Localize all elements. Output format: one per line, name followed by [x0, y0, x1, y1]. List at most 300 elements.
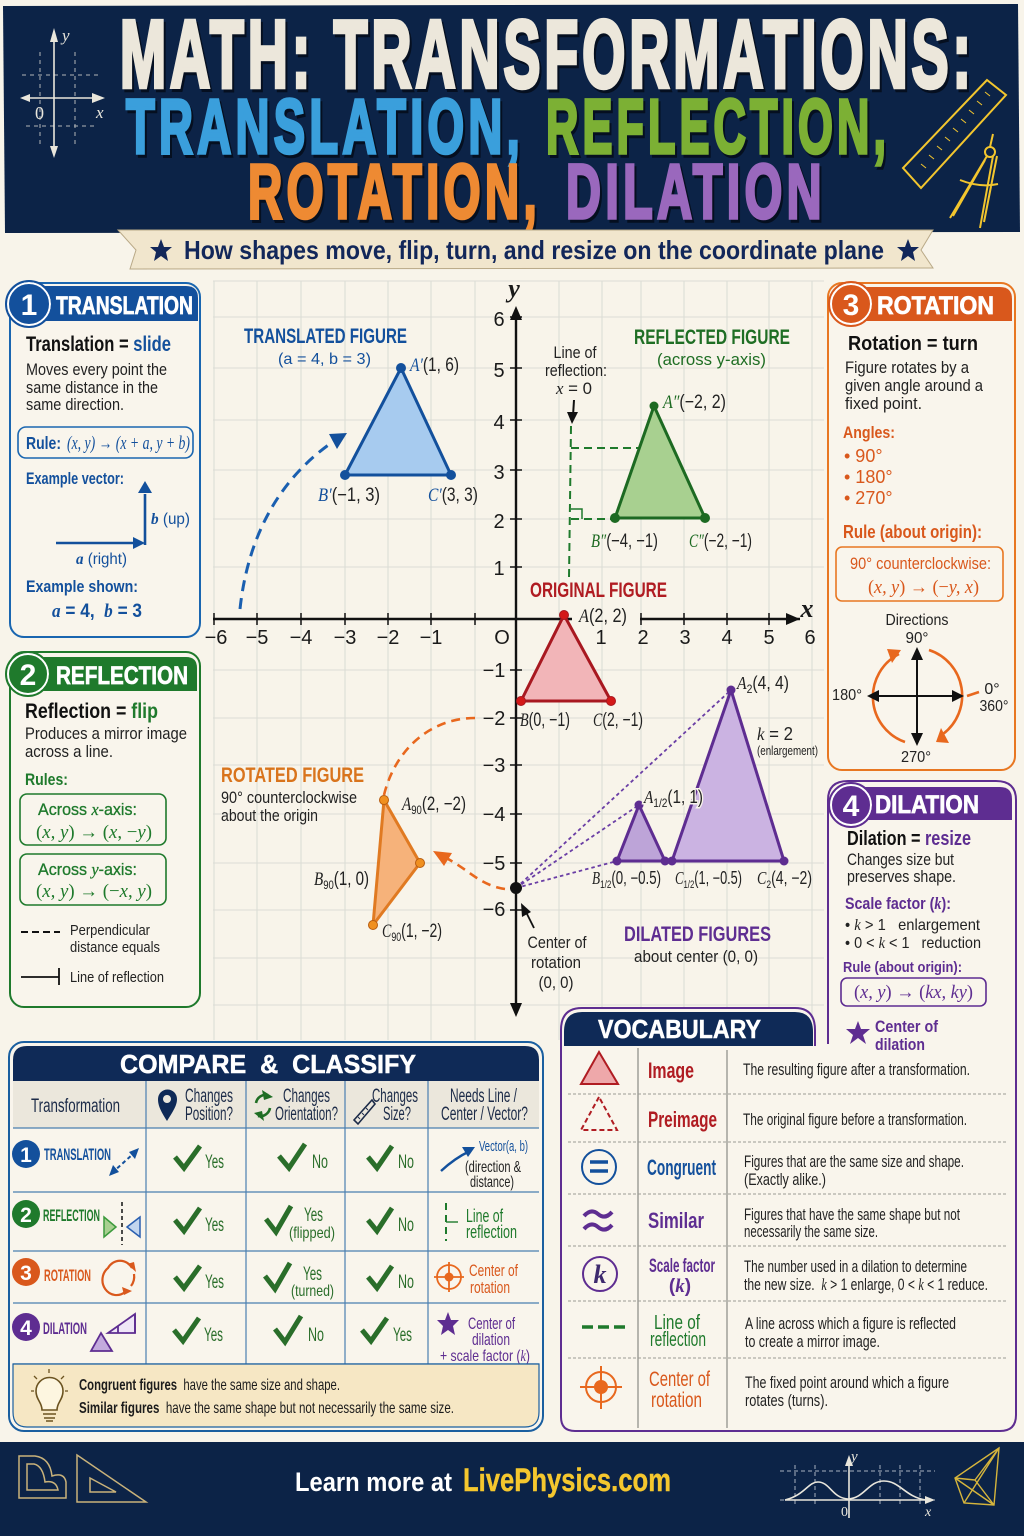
term: congruent: [582, 1150, 964, 1189]
translated figure: [240, 325, 478, 609]
center of dilation note: Center of: [875, 1017, 938, 1036]
directions diagram: 360°: [980, 698, 1008, 715]
term: line of reflection: Line of: [654, 1312, 700, 1334]
panel: vocabulary: [561, 1008, 1016, 1431]
icon: coordinate axes: y: [60, 26, 70, 45]
rotation rule box: [836, 547, 1003, 601]
translated heading: TRANSLATED FIGURE: [244, 325, 407, 348]
axis labels: −2: [377, 627, 399, 649]
dilation rule heading: Rule (about origin):: [843, 959, 962, 976]
column header band: Changes: [185, 1086, 233, 1107]
vector labels: [76, 511, 190, 568]
axis labels: 1: [493, 558, 505, 580]
axis labels: −4: [483, 804, 505, 826]
footer link text: LivePhysics.com: [463, 1462, 671, 1498]
directions diagram: 0°: [984, 681, 1000, 698]
reflection guide lines: [569, 426, 640, 578]
rule box: y-axis: Across y-axis:: [38, 860, 137, 879]
vocabulary header: [564, 1012, 813, 1046]
column header band: Position?: [185, 1104, 233, 1125]
legend: line of reflection: Line of reflection: [70, 969, 164, 986]
line of reflection label: [545, 343, 607, 398]
axis labels: −3: [334, 627, 356, 649]
reflection definition: Reflection = flip: [25, 700, 158, 723]
rotated triangle: [373, 800, 420, 925]
row: rotation: (turned): [291, 1283, 334, 1300]
rotation rule box: 90° counterclockwise:: [850, 554, 991, 573]
angles list: • 270°: [844, 488, 893, 508]
example shown: a = 4, b = 3: [52, 601, 142, 622]
rotated vertex labels: (2, −2): [422, 794, 466, 815]
icon: ruler and compass: [903, 80, 1006, 228]
example vector heading: Example vector:: [26, 470, 124, 488]
term: center of rotation: The fixed point around which a figure: [745, 1373, 949, 1392]
rotation rule heading: Rule (about origin):: [843, 522, 982, 542]
original heading: ORIGINAL FIGURE: [530, 579, 667, 602]
term: congruent: (Exactly alike.): [744, 1170, 826, 1189]
term: center of rotation: Center of: [649, 1368, 710, 1391]
panel: dilation: [828, 781, 1016, 1054]
rotated vertex labels: (1, −2): [401, 921, 442, 942]
axis labels: 5: [493, 360, 505, 382]
row: reflection: 2: [20, 1204, 32, 1227]
row: dilation: Yes: [393, 1325, 412, 1346]
panel: translation: [6, 281, 200, 637]
dilation dotted rays: [516, 690, 731, 888]
reflected figure: [545, 326, 790, 578]
center of rotation: rotation: [531, 953, 581, 972]
dilation labels: 1/2: [600, 879, 611, 891]
center of rotation: Center of: [528, 933, 587, 952]
row: translation: No: [312, 1152, 328, 1173]
dilation labels: 1/2: [683, 879, 694, 891]
rotation description: fixed point.: [845, 395, 922, 413]
translation description: same direction.: [26, 396, 124, 414]
term: preimage: [581, 1097, 967, 1132]
axis labels: 6: [804, 627, 816, 649]
axis labels: −6: [483, 899, 505, 921]
term: scale factor: [583, 1256, 988, 1297]
row: rotation: Yes: [205, 1272, 224, 1293]
icon: coordinate axes: 0: [35, 103, 44, 123]
translated triangle: [345, 368, 451, 475]
row: dilation: [12, 1312, 530, 1365]
line of reflection note: reflection: [466, 1222, 517, 1242]
translation rule box: [18, 427, 193, 458]
reflection description: Produces a mirror image: [25, 725, 187, 743]
row: reflection: [12, 1200, 517, 1245]
center of rotation: (0, 0): [538, 973, 574, 992]
dilation labels: (4, −2): [771, 868, 812, 888]
row: reflection: Yes: [205, 1215, 224, 1236]
scale factor list: Scale factor (k):: [845, 894, 951, 913]
reflected vertices: [610, 402, 710, 523]
icon: light bulb: [31, 1369, 68, 1421]
rotated description: about the origin: [221, 806, 318, 825]
tip callout: [13, 1364, 539, 1427]
axis labels: −4: [290, 627, 312, 649]
row: translation: [12, 1139, 528, 1191]
original vertex labels: C(2, −1): [593, 710, 643, 731]
vector note: Vector(a, b): [479, 1139, 528, 1155]
dilation rule box: (x, y) → (kx, ky): [854, 982, 973, 1003]
translated vertex labels: [318, 355, 478, 506]
dilated heading: DILATED FIGURES: [624, 923, 771, 946]
angles list: • 180°: [844, 467, 893, 487]
header banner: [3, 1, 1020, 235]
term: similar: Similar: [648, 1208, 704, 1233]
axis labels: −2: [483, 708, 505, 730]
title: translation: TRANSLATION,: [126, 84, 524, 170]
term: scale factor: Scale factor: [649, 1256, 715, 1277]
rule box: y-axis: (x, y) → (−x, y): [36, 881, 152, 902]
subtitle text: How shapes move, flip, turn, and resize on the coordinate plane: [184, 235, 884, 265]
term: center of rotation: rotation: [651, 1389, 702, 1412]
dilation labels: C: [757, 868, 767, 888]
rotated heading: ROTATED FIGURE: [221, 764, 364, 787]
dilation labels: B: [592, 868, 600, 888]
column header band: Changes: [372, 1086, 418, 1107]
original figure: [516, 579, 667, 731]
dilation header: [829, 783, 1012, 827]
rotated description: 90° counterclockwise: [221, 788, 357, 807]
dilation labels: A: [736, 673, 747, 693]
center of rotation note: rotation: [470, 1278, 510, 1297]
row: reflection: (flipped): [289, 1225, 335, 1242]
row: rotation: ROTATION: [44, 1266, 91, 1285]
icon: position pin: [158, 1090, 177, 1121]
vector labels: b (up): [151, 511, 190, 528]
original vertex labels: B(0, −1): [520, 710, 570, 731]
translated vertex labels: B′(−1, 3): [318, 485, 380, 506]
axis labels: −1: [420, 627, 442, 649]
center of dilation note: [437, 1312, 530, 1365]
translation rule box: Rule:: [26, 433, 61, 453]
translation header: [6, 281, 198, 327]
reflection header: REFLECTION: [56, 662, 188, 690]
line of reflection note: Line of: [466, 1206, 504, 1226]
row: reflection: Yes: [304, 1205, 323, 1226]
rotated vertex labels: [314, 794, 466, 944]
dilation header: DILATION: [875, 791, 979, 819]
dilation description: Changes size but: [847, 851, 954, 869]
row: translation: Yes: [205, 1152, 224, 1173]
row: rotation: No: [398, 1272, 414, 1293]
row: dilation: Yes: [204, 1325, 223, 1346]
dilated figures: [516, 673, 818, 966]
compare header: [13, 1046, 539, 1081]
angles list: Angles:: [843, 423, 895, 442]
axis labels: O: [494, 627, 510, 649]
column header band: Transformation: [31, 1096, 120, 1117]
rotation rule box: (x, y) → (−y, x): [868, 577, 979, 598]
vocabulary header: VOCABULARY: [598, 1014, 761, 1044]
center of rotation note: [434, 1261, 518, 1297]
rule box: x-axis: [20, 794, 166, 845]
icon: wave graph: [780, 1449, 935, 1520]
icon: wave graph: 0: [841, 1505, 848, 1520]
angles list: [843, 423, 895, 508]
reflected heading: REFLECTED FIGURE: [634, 326, 790, 349]
translation header: TRANSLATION: [56, 292, 193, 320]
dilation labels: (1, 1): [667, 787, 703, 807]
dilation labels: 1/2: [653, 796, 668, 810]
row: translation: 1: [20, 1144, 32, 1167]
dilation labels: C: [675, 868, 684, 888]
example shown: Example shown:: [26, 578, 138, 596]
directions diagram: [832, 612, 1008, 766]
rules heading: Rules:: [25, 771, 68, 789]
row: dilation: 4: [20, 1317, 32, 1340]
panel: rotation: [828, 282, 1015, 770]
row: rotation: Yes: [303, 1264, 322, 1285]
axis labels: 4: [493, 412, 505, 434]
icon: wave graph: x: [924, 1505, 932, 1520]
vector note: (direction &: [465, 1159, 521, 1176]
term: scale factor: k: [594, 1260, 606, 1289]
center of dilation note: dilation: [472, 1330, 510, 1349]
title: dilation: DILATION: [566, 149, 826, 235]
example shown: [26, 578, 142, 622]
icon: wave graph: y: [849, 1449, 858, 1465]
term: line of reflection: to create a mirror image.: [745, 1332, 880, 1351]
table grid lines: [13, 1081, 539, 1364]
dilation description: preserves shape.: [847, 868, 956, 886]
dilation rule box: [841, 978, 986, 1006]
dilation vertices: [612, 686, 788, 866]
panel: reflection: [6, 652, 200, 1007]
center of dilation note: dilation: [875, 1035, 925, 1054]
term: congruent: Congruent: [647, 1155, 716, 1180]
legend: perpendicular: Perpendicular: [70, 922, 150, 939]
dilation labels: k = 2: [757, 724, 793, 744]
term: preimage: Preimage: [648, 1107, 717, 1132]
translation description: same distance in the: [26, 379, 158, 397]
legend: line of reflection: [21, 968, 164, 986]
dilated subheading: about center (0, 0): [634, 947, 758, 966]
reflected triangle: [615, 406, 705, 518]
rotated vertices: [368, 796, 424, 930]
translated vertices: [340, 363, 456, 480]
axis labels: y: [505, 274, 520, 303]
compare header: COMPARE & CLASSIFY: [120, 1049, 416, 1079]
reflected vertex labels: [591, 392, 752, 552]
coordinate plane chart: [205, 274, 824, 1040]
rotation header: 3: [843, 289, 859, 322]
footer link text: [295, 1462, 671, 1498]
translation header: 1: [21, 289, 37, 322]
rotation header: ROTATION: [877, 292, 994, 320]
angles list: • 90°: [844, 446, 883, 466]
rotated vertex labels: 90: [411, 803, 422, 817]
row: rotation: 3: [20, 1262, 32, 1285]
footer link text: Learn more at: [295, 1467, 452, 1497]
center of dilation note: [846, 1017, 938, 1054]
scale factor list: [845, 894, 981, 952]
center of dilation note: Center of: [468, 1314, 515, 1333]
vocabulary table lines: [568, 1048, 1007, 1428]
large triangle: [672, 690, 784, 861]
dilation labels: (1, −0.5): [694, 868, 742, 888]
rotated vertex labels: (1, 0): [334, 869, 369, 890]
dilation labels: 2: [766, 879, 771, 891]
original triangle: [521, 615, 611, 701]
directions diagram: 270°: [901, 749, 931, 766]
column header band: Size?: [383, 1104, 411, 1125]
term: line of reflection: [582, 1312, 956, 1351]
axis labels: 2: [637, 627, 649, 649]
reflection header: [6, 652, 197, 696]
row: reflection: No: [398, 1215, 414, 1236]
column header band: [13, 1081, 539, 1128]
center of rotation: [510, 882, 587, 992]
directions diagram: Directions: [886, 612, 948, 629]
icon: orientation arrows: [254, 1090, 273, 1121]
axis labels: 3: [679, 627, 691, 649]
dilation header: 4: [843, 790, 860, 823]
vector note: [441, 1139, 528, 1191]
footer: [0, 1442, 1024, 1536]
axis labels: 6: [493, 309, 505, 331]
translation definition: Translation = slide: [26, 333, 171, 356]
arrow: rotation arc: [384, 718, 505, 889]
term: scale factor: (k): [669, 1276, 691, 1297]
legend: perpendicular: distance equals: [70, 939, 160, 956]
rotated figure: [221, 718, 505, 944]
row: translation: No: [398, 1152, 414, 1173]
original vertex labels: [520, 606, 643, 731]
translation rule box: (x, y) → (x + a, y + b): [67, 433, 190, 454]
column header band: Changes: [283, 1086, 330, 1107]
icon: coordinate axes: x: [95, 103, 104, 122]
center of rotation note: Center of: [469, 1261, 518, 1280]
axis labels: [205, 274, 816, 921]
row: rotation: [12, 1258, 518, 1300]
small triangle: [617, 805, 665, 861]
axis labels: 5: [763, 627, 775, 649]
rule box: y-axis: [20, 854, 166, 905]
translation description: [26, 361, 167, 414]
translation description: Moves every point the: [26, 361, 167, 379]
dilation labels: (4, 4): [752, 673, 789, 693]
vector arrows: [56, 481, 152, 549]
original vertices: [516, 610, 616, 706]
original vertex labels: A(2, 2): [577, 606, 627, 627]
rotation description: given angle around a: [845, 377, 984, 395]
rotated description: [221, 788, 357, 825]
axis labels: x: [800, 594, 814, 623]
star right: [897, 239, 919, 261]
axis labels: −5: [483, 853, 505, 875]
term: center of rotation: rotates (turns).: [745, 1391, 828, 1410]
dilation labels: (0, −0.5): [611, 868, 661, 888]
translated vertex labels: C′(3, 3): [428, 485, 478, 506]
directions diagram: 90°: [906, 630, 928, 647]
icon: drafting tools: [19, 1455, 146, 1502]
rotation description: Figure rotates by a: [845, 359, 970, 377]
column header band: Center / Vector?: [441, 1104, 528, 1125]
dilation labels: A: [643, 787, 654, 807]
rotation definition: Rotation = turn: [848, 333, 978, 355]
dilation definition: Dilation = resize: [847, 828, 971, 850]
checks: [175, 1144, 392, 1168]
dilation labels: [592, 673, 818, 891]
row: translation: TRANSLATION: [44, 1145, 111, 1164]
scale factor list: • 0 < k < 1 reduction: [845, 935, 981, 952]
tip text: Similar figures have the same shape but not necessarily the same size.: [79, 1400, 454, 1417]
ribbon subtitle: [118, 230, 933, 269]
column header band: Orientation?: [275, 1104, 338, 1125]
term: image: [581, 1052, 970, 1084]
term: scale factor: the new size. k > 1 enlarge, 0 < k < 1 reduce.: [744, 1275, 988, 1294]
reflection description: across a line.: [25, 743, 113, 761]
term: center of rotation: [580, 1366, 949, 1412]
column header band: Needs Line /: [450, 1086, 517, 1107]
dilation labels: 2: [747, 682, 753, 696]
icon: geometric solid: [955, 1448, 999, 1505]
translated subheading: (a = 4, b = 3): [278, 351, 371, 368]
rotated vertex labels: B: [314, 869, 324, 890]
vector labels: a (right): [76, 551, 127, 568]
row: dilation: DILATION: [43, 1319, 87, 1338]
rotated vertex labels: C: [382, 921, 392, 942]
row: dilation: No: [308, 1325, 324, 1346]
reflection header: 2: [20, 659, 36, 692]
term: similar: [584, 1205, 960, 1241]
legend: perpendicular: [21, 922, 160, 956]
line of reflection label: Line of: [554, 343, 597, 362]
term: line of reflection: reflection: [650, 1329, 706, 1351]
rotation header: [829, 282, 1012, 326]
axes: [213, 306, 800, 1017]
rotated vertex labels: 90: [323, 878, 334, 892]
line of reflection label: x = 0: [555, 379, 592, 398]
rotation description: [845, 359, 984, 413]
reflected vertex labels: A″(−2, 2): [661, 392, 726, 413]
directions diagram: 180°: [832, 687, 862, 704]
term: similar: necessarily the same size.: [744, 1222, 878, 1241]
icon: ruler: [354, 1100, 375, 1124]
dilation labels: (enlargement): [757, 743, 818, 758]
axis labels: 4: [721, 627, 733, 649]
rule box: x-axis: (x, y) → (x, −y): [36, 822, 152, 843]
axis labels: 1: [595, 627, 607, 649]
reflected subheading: (across y-axis): [657, 350, 766, 369]
arrow: translation path: [240, 433, 347, 609]
center of dilation note: + scale factor (k): [440, 1348, 530, 1365]
axis labels: −6: [205, 627, 227, 649]
icon: coordinate axes: [20, 26, 105, 158]
axis labels: −1: [483, 660, 505, 682]
vector note: distance): [470, 1174, 514, 1191]
line of reflection label: reflection:: [545, 361, 607, 380]
term: image: Image: [648, 1058, 694, 1083]
tip text: [79, 1377, 454, 1417]
axis labels: −3: [483, 755, 505, 777]
arrow: to line of reflection: [567, 400, 578, 424]
scale factor list: • k > 1 enlargement: [845, 917, 981, 934]
rule box: x-axis: Across x-axis:: [38, 800, 137, 819]
reflected vertex labels: C″(−2, −1): [689, 531, 752, 552]
title: rotation: ROTATION,: [248, 149, 541, 235]
rotated vertex labels: 90: [391, 930, 401, 944]
axis labels: 2: [493, 511, 505, 533]
panel: compare and classify: [9, 1042, 543, 1431]
star left: [150, 239, 172, 261]
row: reflection: REFLECTION: [43, 1206, 100, 1225]
dilation description: [847, 851, 956, 886]
tip text: Congruent figures have the same size and shape.: [79, 1377, 340, 1394]
